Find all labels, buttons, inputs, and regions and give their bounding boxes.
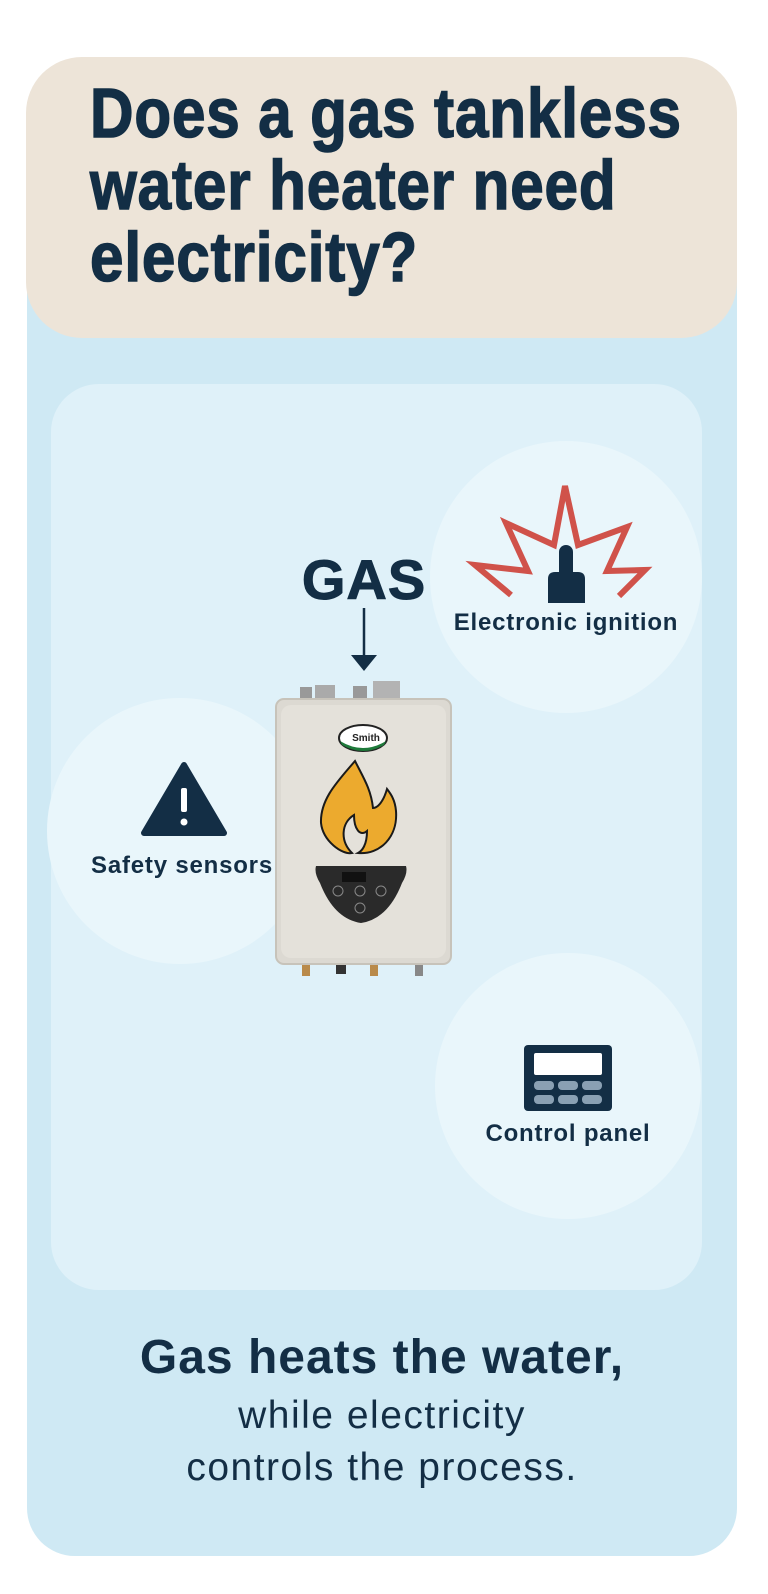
text block: conclusion: Gas heats the water, — [140, 1331, 624, 1384]
arrow: gas down — [351, 608, 377, 671]
label: control panel: Control panel — [485, 1120, 651, 1147]
label: electronic ignition: Electronic ignition — [454, 609, 678, 636]
panel: title box — [26, 57, 737, 338]
water heater: Smith — [352, 733, 380, 744]
text block: conclusion: while electricity — [238, 1394, 526, 1437]
flame — [321, 761, 396, 853]
label: GAS: GAS — [302, 548, 426, 611]
title: Does a gas tankless — [90, 74, 682, 152]
text block: conclusion: controls the process. — [186, 1446, 578, 1489]
icon: spark — [475, 486, 645, 603]
icon: warning — [144, 765, 224, 833]
text block: conclusion — [140, 1331, 624, 1489]
title: water heater need — [90, 146, 617, 224]
title — [89, 74, 682, 296]
icon: keypad — [524, 1045, 612, 1111]
panel: blue background — [27, 200, 737, 1556]
circle: safety sensors — [47, 698, 313, 964]
label: safety sensors: Safety sensors — [91, 852, 273, 879]
control display — [316, 866, 406, 923]
title: electricity? — [90, 218, 418, 296]
logo — [339, 725, 387, 751]
water heater — [276, 681, 451, 976]
circle: control panel — [435, 953, 701, 1219]
panel: inner diagram — [51, 384, 702, 1290]
circle: electronic ignition — [430, 441, 702, 713]
